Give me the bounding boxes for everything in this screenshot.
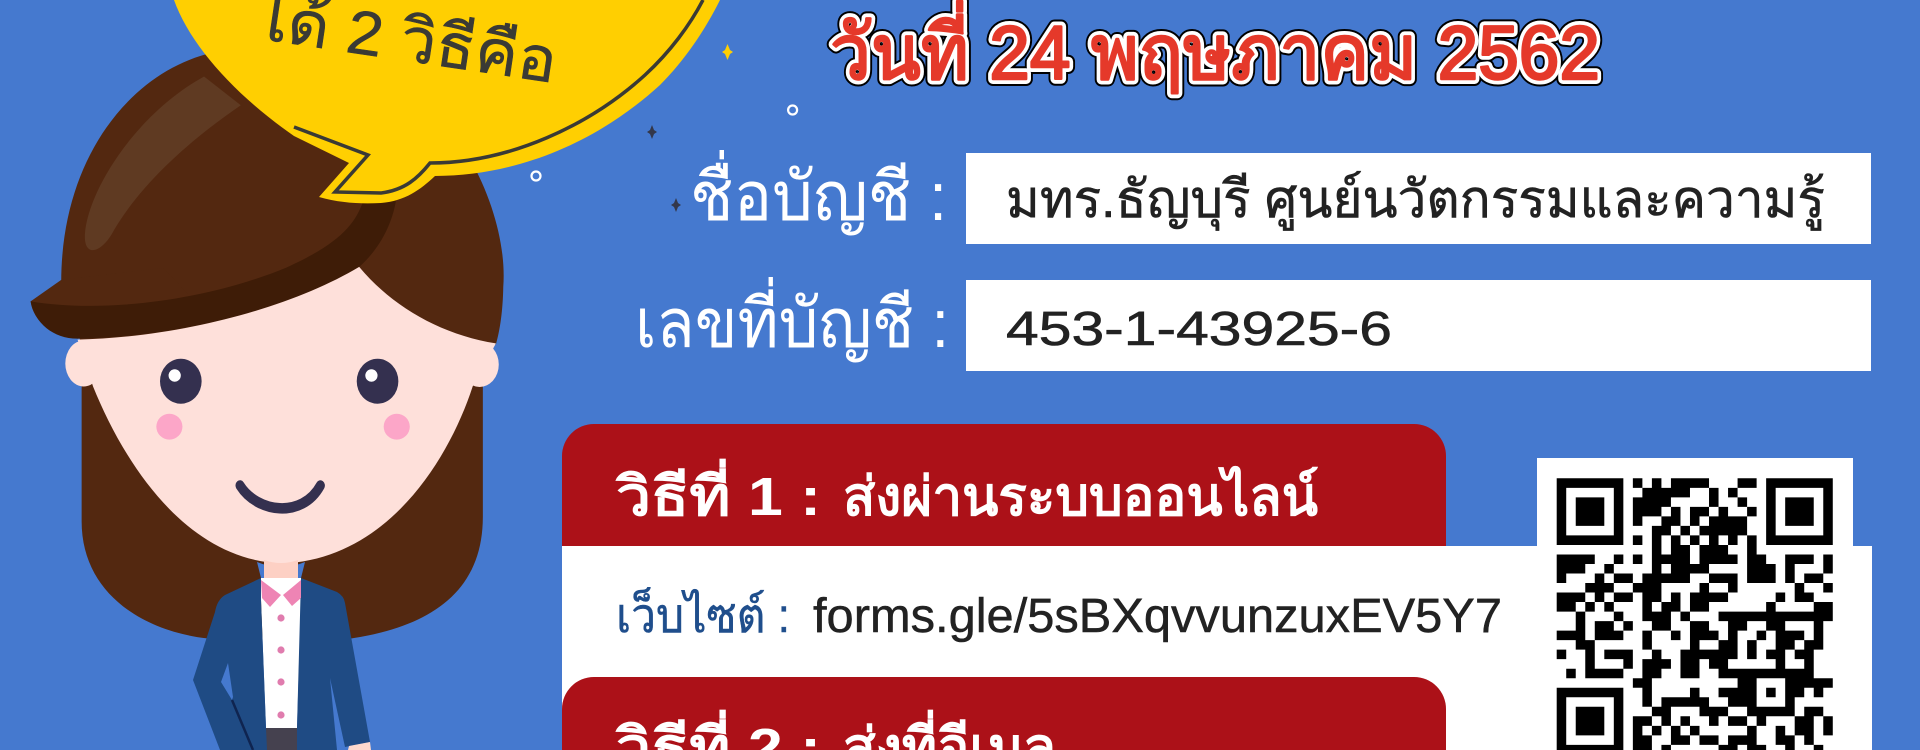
method 2 tab: [562, 677, 1446, 750]
method 1 tab: ส่งผ่านระบบออนไลน์: [843, 465, 1319, 527]
decorative sparkles: [532, 44, 797, 212]
account name field: [966, 153, 1871, 244]
website line: เว็บไซต์ :: [616, 587, 790, 643]
account number field: 453-1-43925-6: [1006, 303, 1392, 356]
account name label: ชื่อบัญชี :: [690, 150, 947, 235]
white content area: [562, 546, 1872, 750]
account name field: มทร.ธัญบุรี ศูนย์นวัตกรรมและความรู้: [1006, 171, 1825, 231]
account number field: [966, 280, 1871, 371]
method 1 tab: วิธีที่ 1 :: [615, 458, 821, 527]
speech bubble: [174, 0, 720, 203]
date heading: วันที่ 24 พฤษภาคม 2562: [830, 1, 1600, 96]
method 1 tab: [562, 424, 1446, 546]
QR code: [1537, 458, 1853, 750]
panel: submission methods: [562, 424, 1872, 750]
illustration: smiling woman in blue jacket: [31, 53, 504, 750]
account number label: เลขที่บัญชี :: [635, 277, 949, 362]
date heading: วันที่ 24 พฤษภาคม 2562: [830, 1, 1600, 96]
date heading: วันที่ 24 พฤษภาคม 2562: [830, 1, 1600, 96]
website line: forms.gle/5sBXqvvunzuxEV5Y7: [813, 590, 1502, 643]
